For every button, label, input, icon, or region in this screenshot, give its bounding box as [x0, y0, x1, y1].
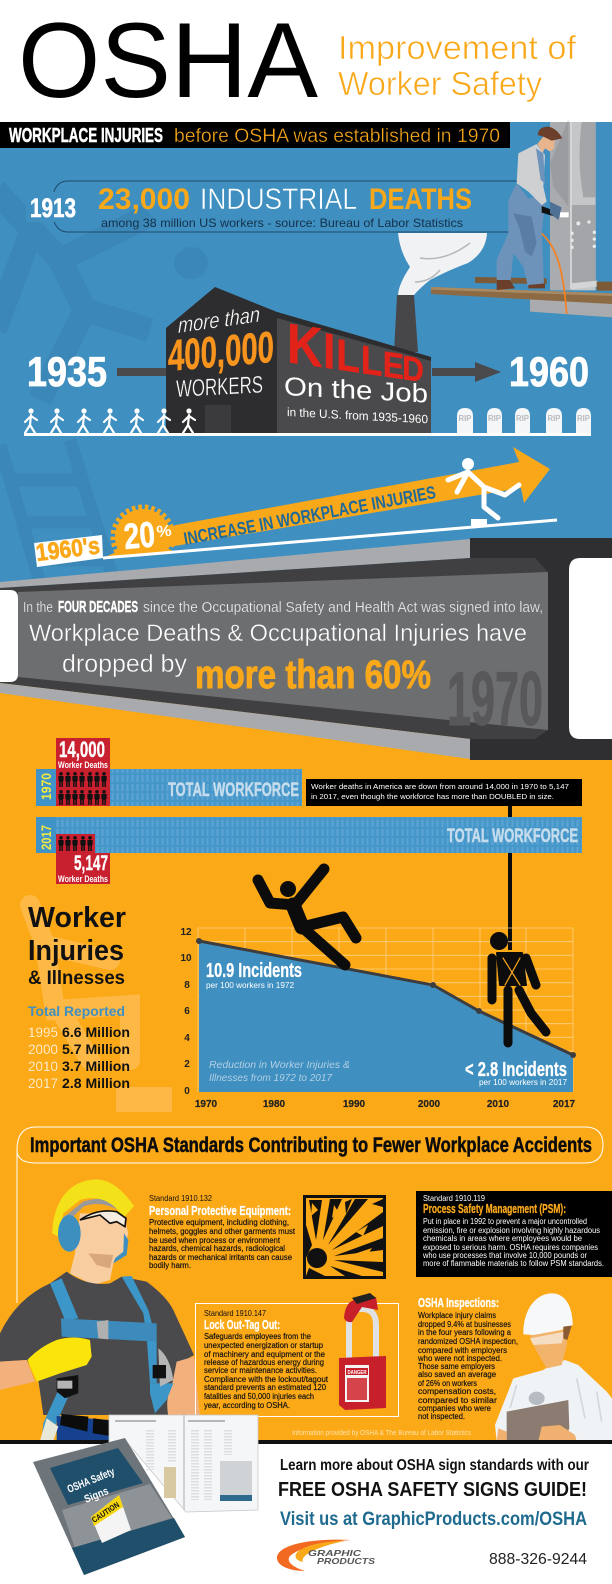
panel: 1960s 20% increase arrow: 1960's: [34, 532, 101, 567]
text: OSHA inspections: not inspected.: [418, 1412, 465, 1421]
icon: factory chimney: [394, 295, 418, 352]
text: OSHA inspections: companies who were: [418, 1404, 492, 1413]
header bar: before OSHA was established in 1970: [174, 126, 500, 147]
phone number: 888-326-9244: [489, 1551, 587, 1568]
icon: ghost falling figure and ladder: [0, 190, 208, 590]
icon: inspector with clipboard: [495, 1293, 612, 1441]
text: worker injuries and totals: 3.7 Million: [62, 1058, 130, 1074]
icon: worker with hard hat and harness: [0, 1179, 200, 1441]
text: call to action: [278, 1457, 589, 1530]
icon: open safety signs guide: [109, 1415, 258, 1512]
header bar: WORKPLACE INJURIES: [9, 125, 163, 147]
text: OSHA inspections: [417, 1295, 518, 1421]
panel: 1913 statistic: among 38 million US workers - source: Bureau of Labor Statistics: [101, 216, 463, 230]
text: OSHA inspections: of 26% on workers: [418, 1379, 477, 1388]
panel: factory with 400,000 killed: L: [361, 338, 382, 386]
text: worker injuries and totals: 1995: [28, 1024, 58, 1040]
panel: orange background: [0, 585, 612, 1441]
panel: factory with 400,000 killed: D: [402, 348, 424, 390]
panel: process safety management: who use processes that involve 10,000 pounds or: [422, 1251, 587, 1260]
text: worker injuries and totals: & Illnesses: [28, 968, 125, 989]
chart: incident rate area chart: [180, 927, 576, 1110]
text: personal protective equipment: Protective equipment, including clothing,: [149, 1218, 289, 1227]
icon: walking workers: [25, 408, 195, 433]
text: OSHA inspections: who were not inspected.: [417, 1354, 502, 1363]
text: OSHA inspections: in the four years following a: [418, 1328, 512, 1337]
panel: lock out tag out: unexpected energization or startup: [204, 1341, 324, 1350]
panel: process safety management: emission, fire or explosion involving highly hazardous: [423, 1226, 600, 1235]
callout: worker deaths text: [306, 779, 582, 806]
panel: 1970 workforce bar: 1970: [38, 773, 54, 800]
panel: 1960s 20% increase arrow: %: [156, 523, 172, 541]
panel: process safety management: exposed to serious harm. OSHA requires companies: [423, 1243, 598, 1252]
text: call to action: FREE OSHA SAFETY SIGNS GUIDE!: [278, 1479, 587, 1501]
chart: incident rate area chart: 12: [180, 927, 192, 938]
text: OSHA inspections: compensation costs,: [418, 1387, 496, 1396]
panel: I-beam with 60% drop message: FOUR DECADES: [58, 599, 138, 616]
panel: lock out tag out: [196, 1304, 398, 1416]
panel: lock out tag out: year, according to OSHA.: [204, 1401, 290, 1410]
callout: worker deaths text: in 2017, even though the workforce has more than DOUBLED in size.: [311, 792, 554, 801]
chart: incident rate area chart: 4: [184, 1033, 190, 1044]
panel: factory with 400,000 killed: 400,000: [168, 323, 274, 381]
chart: incident rate area chart: 6: [184, 1006, 190, 1017]
chart: incident rate area chart: 2: [184, 1059, 190, 1070]
icon: red padlock: DANGER: [348, 1370, 367, 1376]
chart: incident rate area chart: 10.9 Incidents: [206, 960, 302, 982]
logo: Graphic Products: GRAPHIC: [308, 1548, 362, 1558]
text: worker injuries and totals: Worker: [28, 902, 126, 934]
source note: Information provided by OSHA & The Bureau of Labor Statistics: [292, 1430, 471, 1437]
year 1935: 1935: [27, 348, 107, 395]
panel: 2017 workforce bar: 5,147: [74, 852, 108, 875]
text: personal protective equipment: Standard 1910.132: [149, 1194, 213, 1203]
panel: factory with 400,000 killed: I: [323, 323, 335, 381]
text: personal protective equipment: Personal Protective Equipment:: [149, 1203, 291, 1218]
footer band: [0, 1440, 612, 1584]
panel: 1960s 20% increase arrow: 20: [122, 513, 157, 557]
chart: incident rate area chart: Illnesses from 1972 to 2017: [209, 1073, 332, 1084]
panel: blue background: [0, 122, 612, 590]
icon: gravestones: RIP: [488, 414, 502, 423]
chart: incident rate area chart: per 100 workers in 2017: [479, 1078, 568, 1087]
panel: 1970 workforce bar: Worker Deaths: [58, 760, 108, 770]
panel: lock out tag out: Compliance with the lockout/tagout: [204, 1375, 329, 1384]
panel: process safety management: more of flammable materials to follow PSM standards.: [423, 1259, 604, 1268]
icon: ghost figure behind injuries: [30, 905, 172, 1112]
panel: I-beam with 60% drop message: more than 60%: [195, 653, 431, 697]
icon: slipping figure: [448, 458, 519, 518]
callout: worker deaths text: Worker deaths in America are down from around 14,000 in 1970 to 5,147: [311, 782, 569, 791]
panel: 1970 workforce bar: 14,000: [59, 737, 105, 762]
chart: incident rate area chart: 1970: [195, 1099, 218, 1110]
icon: explosive hazard sign: [304, 1196, 384, 1278]
panel: factory with 400,000 killed: in the U.S. from 1935-1960: [287, 405, 428, 426]
panel: 2017 workforce bar: Worker Deaths: [58, 874, 108, 884]
text: worker injuries and totals: 2.8 Million: [62, 1075, 130, 1091]
panel: 2017 workforce bar: [36, 817, 582, 884]
text: OSHA inspections: randomized OSHA inspection,: [418, 1337, 518, 1346]
text: worker injuries and totals: 2000: [28, 1041, 58, 1057]
chart: incident rate area chart: 1990: [343, 1099, 366, 1110]
subtitle: [338, 29, 577, 102]
text: personal protective equipment: helmets, goggles and other garments must: [149, 1227, 296, 1236]
text: worker injuries and totals: 2017: [28, 1075, 58, 1091]
panel: I-beam with 60% drop message: since the Occupational Safety and Health Act was signed into law,: [143, 599, 543, 616]
heading: important OSHA standards: [17, 1127, 603, 1303]
icon: gravestones: [457, 408, 591, 433]
panel: factory with 400,000 killed: On the Job: [284, 371, 428, 409]
icon: harnessed figure on rope: [490, 932, 546, 1043]
panel: factory with 400,000 killed: E: [383, 344, 404, 388]
text: OSHA inspections: Workplace injury claims: [418, 1311, 496, 1320]
panel: factory with 400,000 killed: more than: [178, 302, 260, 338]
text: worker injuries and totals: [28, 902, 130, 1091]
icon: gravestones: RIP: [577, 414, 591, 423]
chart: incident rate area chart: 8: [184, 980, 190, 991]
chart: incident rate area chart: per 100 workers in 1972: [206, 981, 295, 990]
text: OSHA inspections: OSHA Inspections:: [418, 1295, 499, 1310]
panel: lock out tag out: standard prevents an estimated 120: [204, 1383, 327, 1392]
icon: closed safety signs guide: [33, 1438, 185, 1575]
subtitle: Improvement of: [338, 29, 577, 66]
panel: lock out tag out: Standard 1910.147: [204, 1309, 266, 1318]
text: worker injuries and totals: Total Reported: [28, 1003, 125, 1019]
text: personal protective equipment: hazards, chemical hazards, radiological: [149, 1244, 285, 1253]
panel: lock out tag out: release of hazardous energy during: [204, 1358, 324, 1367]
icon: closed safety signs guide: CAUTION: [90, 1500, 121, 1525]
panel: 1913 statistic: DEATHS: [369, 183, 472, 216]
text: worker injuries and totals: 2010: [28, 1058, 58, 1074]
panel: I-beam with 60% drop message: In the: [23, 599, 53, 616]
panel: lock out tag out: fatalities and 50,000 injuries each: [204, 1392, 314, 1401]
panel: 1970 workforce bar: [36, 737, 302, 806]
panel: 1913 statistic: INDUSTRIAL: [200, 183, 357, 216]
panel: process safety management: Put in place in 1992 to prevent a major uncontrolled: [423, 1217, 587, 1226]
text: OSHA inspections: dropped 9.4% at businesses: [418, 1320, 511, 1329]
panel: factory with 400,000 killed: L: [336, 329, 360, 382]
icon: closed safety signs guide: Signs: [83, 1485, 110, 1506]
text: worker injuries and totals: 5.7 Million: [62, 1041, 130, 1057]
icon: gravestones: RIP: [516, 414, 530, 423]
panel: I-beam with 60% drop message: dropped by: [62, 650, 187, 678]
panel: I-beam with 60% drop message: [0, 538, 612, 760]
chart: incident rate area chart: 2010: [487, 1099, 510, 1110]
panel: 2017 workforce bar: 2017: [38, 825, 54, 850]
text: worker injuries and totals: Injuries: [28, 935, 124, 967]
panel: process safety management: Standard 1910.119: [423, 1194, 486, 1203]
text: OSHA inspections: compared to similar: [418, 1396, 497, 1405]
text: OSHA inspections: Those same employers: [418, 1362, 495, 1371]
icon: falling figure: [258, 869, 356, 965]
panel: 1960s 20% increase arrow: [34, 447, 557, 567]
panel: 1913 statistic: 23,000: [98, 183, 190, 216]
panel: 1913 statistic: [26, 181, 540, 232]
icon: factory smoke: [398, 233, 487, 296]
panel: factory with 400,000 killed: K: [287, 312, 323, 380]
logo: Graphic Products: PRODUCTS: [317, 1556, 375, 1566]
icon: gravestones: RIP: [548, 414, 561, 423]
text: personal protective equipment: bodily harm.: [149, 1261, 191, 1270]
panel: lock out tag out: Safeguards employees from the: [204, 1332, 312, 1341]
chart: incident rate area chart: 0: [184, 1086, 190, 1097]
text: worker injuries and totals: 6.6 Million: [62, 1024, 130, 1040]
panel: 1913 statistic: 1913: [30, 193, 76, 223]
arrow: 1935 to 1960: [117, 362, 501, 382]
text: OSHA inspections: compared with employers: [418, 1346, 507, 1355]
panel: I-beam with 60% drop message: 1970: [447, 657, 543, 742]
panel: process safety management: chemicals in areas where employees would be: [423, 1234, 583, 1243]
subtitle: Worker Safety: [338, 65, 542, 102]
header bar: [0, 122, 510, 148]
year 1960: 1960: [509, 348, 589, 395]
ground line: [24, 433, 591, 436]
rope from callout: [508, 806, 512, 950]
panel: I-beam with 60% drop message: Workplace Deaths & Occupational Injuries have: [29, 620, 527, 647]
chart: incident rate area chart: 10: [180, 953, 192, 964]
text: personal protective equipment: hazards or mechanical irritants can cause: [149, 1253, 293, 1262]
panel: process safety management: [416, 1191, 612, 1277]
panel: 1970 workforce bar: TOTAL WORKFORCE: [168, 780, 299, 801]
icon: gravestones: RIP: [458, 414, 472, 423]
icon: red padlock: [339, 1293, 386, 1410]
text: personal protective equipment: [149, 1194, 296, 1270]
panel: lock out tag out: of machinery and equipment or the: [204, 1350, 326, 1359]
chart: incident rate area chart: 2000: [418, 1099, 441, 1110]
title: OSHA: OSHA: [18, 0, 319, 120]
panel: lock out tag out: Lock Out-Tag Out:: [204, 1317, 280, 1332]
logo: Graphic Products: [277, 1540, 375, 1571]
panel: 1960s 20% increase arrow: INCREASE IN WORKPLACE INJURIES: [182, 482, 437, 549]
panel: lock out tag out: service or maintenance activities.: [204, 1366, 317, 1375]
chart: incident rate area chart: < 2.8 Incidents: [465, 1059, 567, 1081]
text: personal protective equipment: be used when process or environment: [149, 1236, 281, 1245]
icon: closed safety signs guide: OSHA Safety: [66, 1466, 117, 1496]
chart: incident rate area chart: Reduction in Worker Injuries &: [209, 1060, 350, 1071]
panel: factory with 400,000 killed: WORKERS: [176, 371, 263, 403]
chart: incident rate area chart: 2017: [553, 1099, 576, 1110]
chart: incident rate area chart: 1980: [263, 1099, 286, 1110]
panel: factory with 400,000 killed: [166, 287, 431, 433]
text: OSHA inspections: also saved an average: [418, 1370, 497, 1379]
icon: construction worker on beam: [431, 120, 612, 317]
